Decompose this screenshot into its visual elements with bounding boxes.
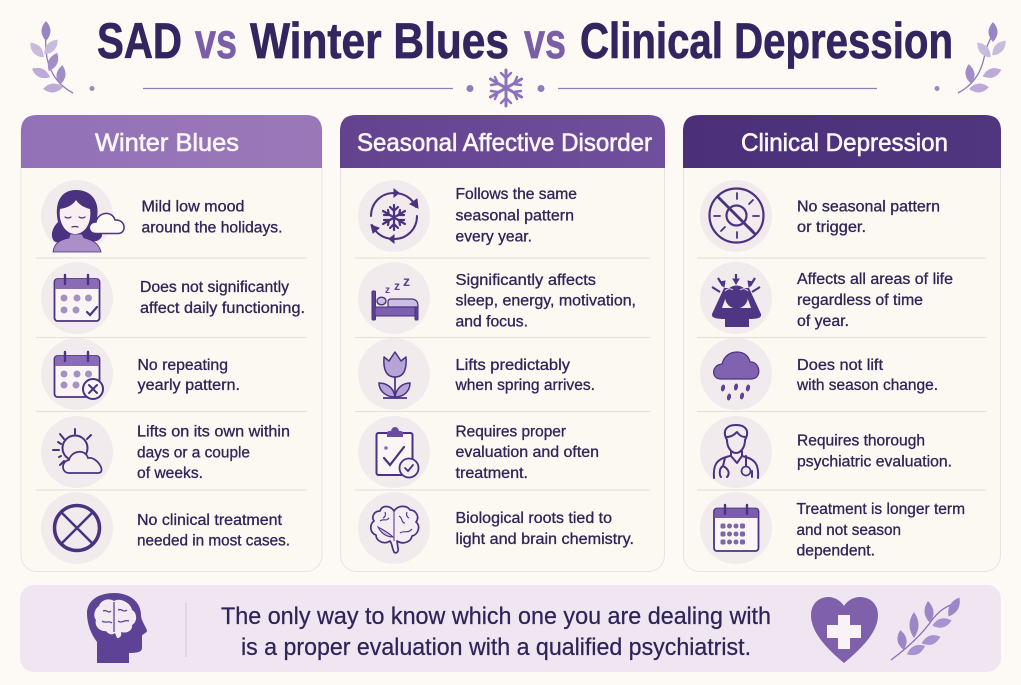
icon: left leaf branch bbox=[27, 21, 73, 93]
icon: right leaf branch bbox=[958, 22, 1009, 93]
row: proper evaluation: evaluation and often bbox=[456, 444, 599, 461]
panel: winter blues bbox=[21, 115, 322, 572]
row: does not lift bbox=[700, 338, 938, 410]
row: daily functioning: Does not significantly bbox=[140, 279, 289, 296]
row: psychiatric evaluation: Requires thorough bbox=[797, 432, 925, 450]
header: clinical depression bbox=[683, 115, 1001, 168]
row: sleep energy: sleep, energy, motivation, bbox=[456, 292, 636, 310]
icon: bottom leaf branch bbox=[891, 595, 963, 660]
row: proper evaluation: Requires proper bbox=[456, 424, 566, 440]
row: biological roots: Biological roots tied to bbox=[456, 510, 612, 527]
row: no seasonal pattern bbox=[700, 180, 940, 252]
row: sleep energy: z bbox=[394, 279, 400, 293]
row: all areas of life: regardless of time bbox=[797, 292, 923, 309]
row: same seasonal pattern: every year. bbox=[456, 228, 532, 246]
title: Winter Blues bbox=[250, 13, 509, 69]
title rule with snowflake bbox=[90, 70, 940, 106]
row: lifts on its own: Lifts on its own within bbox=[137, 424, 290, 440]
header: seasonal affective disorder bbox=[340, 115, 665, 168]
panel: seasonal affective disorder bbox=[340, 115, 665, 572]
row: proper evaluation bbox=[358, 416, 599, 488]
row: longer-term treatment bbox=[700, 492, 965, 564]
row: no clinical treatment: needed in most cases. bbox=[137, 532, 290, 550]
row: does not lift: with season change. bbox=[796, 377, 938, 394]
row: daily functioning bbox=[41, 262, 305, 334]
row: same seasonal pattern: Follows the same bbox=[456, 186, 577, 203]
row: sleep energy: Significantly affects bbox=[456, 272, 596, 289]
panel: clinical depression bbox=[683, 115, 1001, 572]
row: does not lift: Does not lift bbox=[797, 357, 884, 374]
row: same seasonal pattern: seasonal pattern bbox=[456, 208, 574, 224]
row: daily functioning: affect daily functioning. bbox=[140, 300, 305, 317]
row: all areas of life: of year. bbox=[797, 313, 849, 330]
icon: heart with cross bbox=[811, 597, 878, 663]
row: sleep energy: z bbox=[403, 273, 410, 289]
row: no yearly pattern: No repeating bbox=[138, 357, 228, 374]
row: no seasonal pattern: No seasonal pattern bbox=[797, 198, 940, 216]
row: psychiatric evaluation bbox=[700, 416, 952, 488]
header: seasonal affective disorder: Seasonal Affective Disorder bbox=[357, 129, 652, 157]
panel: bottom callout bbox=[20, 585, 1001, 672]
row: longer-term treatment: and not season bbox=[796, 522, 901, 539]
row: all areas of life: Affects all areas of life bbox=[797, 271, 953, 288]
title bbox=[97, 13, 953, 69]
row: lifts on its own: days or a couple bbox=[137, 444, 250, 462]
title: vs bbox=[195, 13, 237, 69]
row: biological roots bbox=[358, 492, 634, 564]
row: lifts on its own bbox=[41, 416, 290, 488]
callout text bbox=[221, 603, 771, 661]
row: mild low mood: around the holidays. bbox=[142, 220, 282, 236]
row: no yearly pattern: yearly pattern. bbox=[138, 377, 240, 394]
row: longer-term treatment: dependent. bbox=[796, 542, 875, 560]
callout text: is a proper evaluation with a qualified psychiatrist. bbox=[241, 634, 751, 661]
row: sleep energy bbox=[358, 262, 636, 334]
title: vs bbox=[524, 13, 566, 69]
row: biological roots: light and brain chemistry. bbox=[456, 531, 634, 548]
header: winter blues bbox=[21, 115, 322, 168]
row: lifts on its own: of weeks. bbox=[137, 465, 203, 482]
icon: head with brain bbox=[87, 593, 147, 663]
row: longer-term treatment: Treatment is longer term bbox=[796, 501, 965, 518]
row: sleep energy: and focus. bbox=[456, 314, 528, 330]
row: lifts with spring: Lifts predictably bbox=[456, 357, 570, 374]
title: SAD bbox=[97, 13, 182, 69]
row: psychiatric evaluation: psychiatric evaluation. bbox=[797, 454, 952, 470]
row: lifts with spring bbox=[358, 338, 595, 410]
row: no yearly pattern bbox=[41, 338, 240, 410]
callout text: The only way to know which one you are dealing with bbox=[221, 603, 771, 630]
row: sleep energy: z bbox=[385, 285, 390, 296]
row: no clinical treatment: No clinical treatment bbox=[137, 512, 283, 529]
header: clinical depression: Clinical Depression bbox=[741, 129, 948, 157]
row: no clinical treatment bbox=[41, 492, 290, 564]
row: same seasonal pattern bbox=[358, 180, 577, 252]
row: all areas of life bbox=[700, 262, 953, 334]
row: proper evaluation: treatment. bbox=[456, 465, 528, 482]
header: winter blues: Winter Blues bbox=[95, 129, 239, 157]
row: mild low mood bbox=[41, 180, 282, 252]
row: no seasonal pattern: or trigger. bbox=[797, 219, 866, 236]
row: lifts with spring: when spring arrives. bbox=[454, 377, 595, 394]
row: mild low mood: Mild low mood bbox=[142, 198, 244, 216]
